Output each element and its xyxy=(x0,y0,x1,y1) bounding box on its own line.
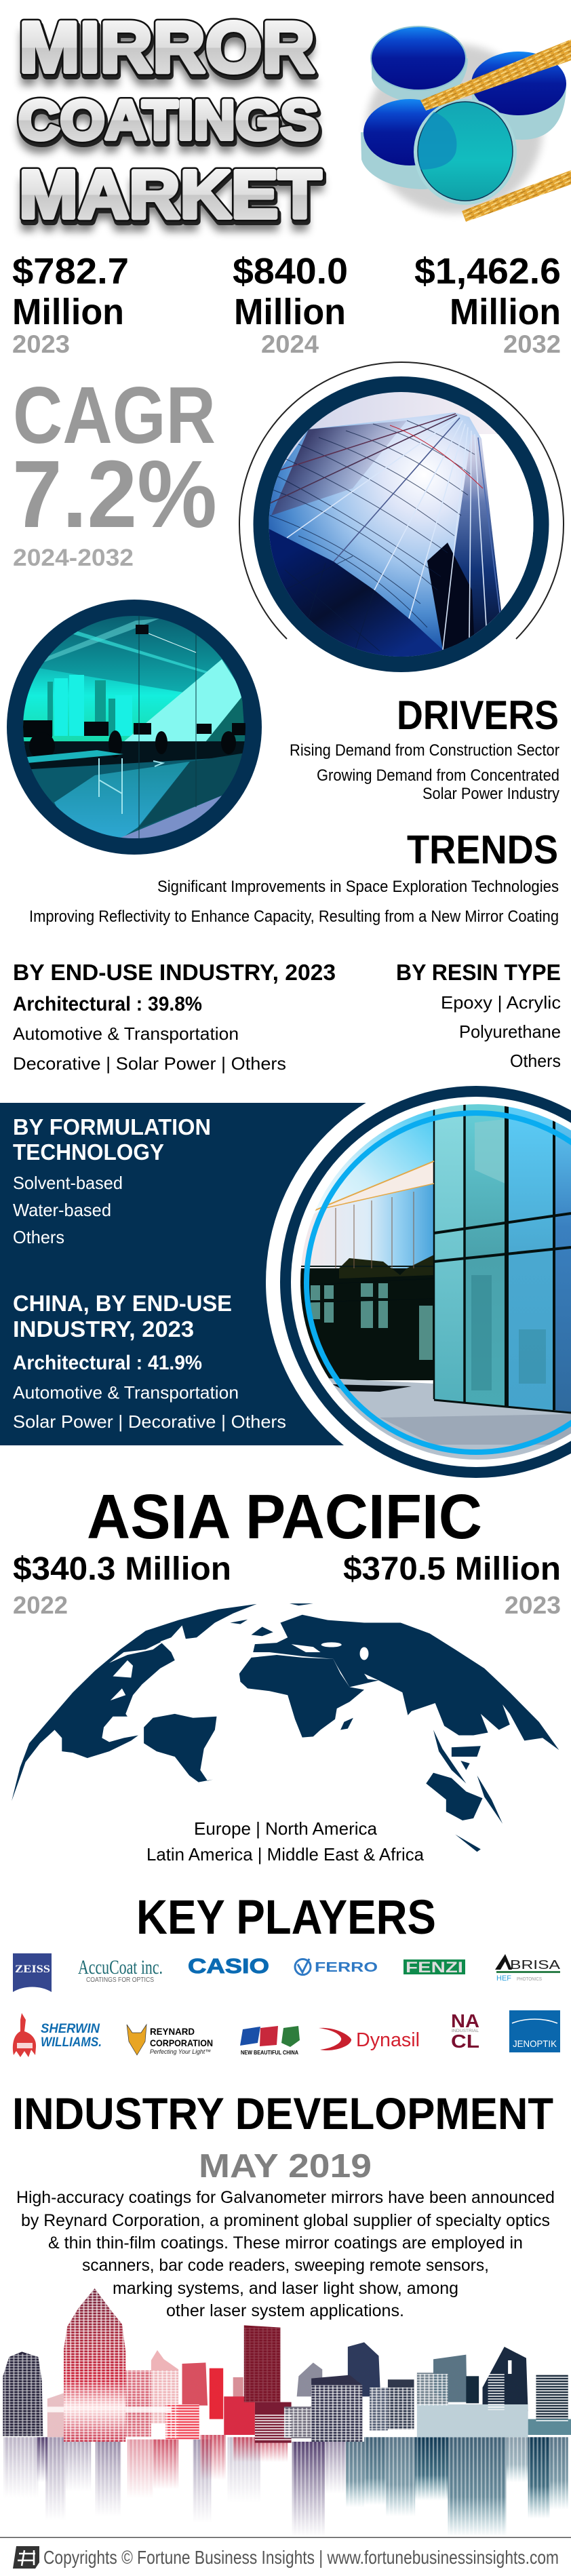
segment: by formulation technology: Others xyxy=(13,1227,64,1247)
segment: china by end-use industry: Automotive & Transportation xyxy=(13,1382,239,1403)
logo: New Beautiful China: NEW BEAUTIFUL CHINA xyxy=(241,2049,298,2056)
segment: china by end-use industry xyxy=(13,1291,286,1432)
photo circle: glass building xyxy=(266,1072,571,1492)
logo: Ferro: FERRO xyxy=(315,1960,378,1975)
title shadow: MARKET xyxy=(19,168,321,243)
segment: by resin type: Others xyxy=(510,1051,561,1071)
title face: MARKET xyxy=(19,157,321,233)
title shadow: COATINGS xyxy=(18,100,319,162)
logo: Fenzi xyxy=(403,1959,465,1976)
stat: 2032: $1,462.6 xyxy=(414,251,561,292)
other regions: Latin America | Middle East & Africa xyxy=(146,1844,425,1865)
stat: asia pacific 2022: 2022 xyxy=(13,1591,68,1619)
segment: by end-use industry xyxy=(13,960,336,1074)
paragraph: industry development: by Reynard Corporation, a prominent global supplier of specialty optics xyxy=(21,2211,550,2230)
paragraph: industry development: & thin thin-film coatings. These mirror coatings are employed in xyxy=(48,2233,523,2252)
trend items xyxy=(29,878,559,926)
other regions: Europe | North America xyxy=(194,1818,378,1839)
logo: NACL xyxy=(451,2010,479,2052)
title extrusion: COATINGS xyxy=(20,93,320,155)
segment: by formulation technology: BY FORMULATION xyxy=(13,1114,211,1139)
heading: trends: TRENDS xyxy=(407,827,558,872)
segment: by formulation technology: Solvent-based xyxy=(13,1173,123,1193)
title extrusion xyxy=(20,11,323,236)
segment: by end-use industry: Architectural : 39.8% xyxy=(13,993,202,1015)
paragraph: industry development: High-accuracy coatings for Galvanometer mirrors have been announced xyxy=(16,2188,555,2207)
heading: asia pacific: ASIA PACIFIC xyxy=(87,1481,482,1552)
stat: 2032 xyxy=(414,251,561,358)
skyline image xyxy=(0,2288,571,2537)
CAGR block: CAGR xyxy=(13,370,216,461)
driver items: Solar Power Industry xyxy=(422,785,559,803)
logo: Reynard Corporation: REYNARD xyxy=(150,2026,195,2037)
segment: by formulation technology: TECHNOLOGY xyxy=(13,1139,164,1165)
stat: 2023 xyxy=(12,251,129,358)
panel: navy band xyxy=(0,1103,420,1445)
logo: AccuCoat xyxy=(78,1956,163,1984)
stat: 2023: 2023 xyxy=(12,330,70,358)
title outline: MIRROR xyxy=(19,7,315,87)
logo: Reynard Corporation: CORPORATION xyxy=(150,2037,213,2048)
logo: NACL: CL xyxy=(451,2031,479,2052)
stat: 2024 xyxy=(233,251,348,358)
logo: New Beautiful China xyxy=(240,2026,300,2056)
title shadow: MIRROR xyxy=(19,18,315,98)
segment: china by end-use industry: Solar Power | Decorative | Others xyxy=(13,1411,286,1432)
title face: COATINGS xyxy=(18,90,319,151)
logo: Fenzi: FENZI xyxy=(406,1959,463,1976)
logo: Abrisa: BRISA xyxy=(510,1958,560,1972)
logo: Ferro xyxy=(295,1959,378,1975)
stat: 2023: $782.7 xyxy=(12,251,129,292)
segment: by end-use industry: BY END-USE INDUSTRY, 2023 xyxy=(13,960,336,985)
segment: by formulation technology xyxy=(13,1114,211,1247)
logo: Reynard Corporation xyxy=(127,2025,213,2055)
stat: 2024: Million xyxy=(234,292,346,332)
segment: by resin type: BY RESIN TYPE xyxy=(396,960,561,985)
heading: key players: KEY PLAYERS xyxy=(136,1891,436,1945)
title xyxy=(18,7,323,243)
paragraph: industry development: scanners, bar code readers, sweeping remote sensors, xyxy=(82,2256,489,2275)
segment: by resin type xyxy=(396,960,561,1071)
logo: AccuCoat: AccuCoat inc. xyxy=(78,1956,163,1978)
photo circle: glass tower xyxy=(239,362,564,672)
CAGR block xyxy=(12,370,217,571)
logo: Sherwin-Williams: SHERWIN xyxy=(41,2022,100,2036)
trends xyxy=(29,827,559,926)
segment: by end-use industry: Decorative | Solar Power | Others xyxy=(13,1053,286,1074)
CAGR block: 2024-2032 xyxy=(13,545,134,571)
stat: 2024: $840.0 xyxy=(233,251,348,292)
logo: Sherwin-Williams: WILLIAMS. xyxy=(41,2035,102,2050)
paragraph: industry development xyxy=(16,2188,555,2320)
other regions xyxy=(146,1818,425,1865)
title outline: COATINGS xyxy=(18,90,319,151)
title outline: MARKET xyxy=(19,157,321,233)
icon: coated mirror lenses xyxy=(361,26,571,222)
paragraph: industry development: other laser system applications. xyxy=(166,2301,404,2320)
logo: NACL: NA xyxy=(451,2010,479,2031)
driver items xyxy=(290,741,559,803)
logo: Jenoptik: JENOPTIK xyxy=(513,2038,557,2049)
segment: by end-use industry: Automotive & Transportation xyxy=(13,1023,239,1044)
segment: china by end-use industry: INDUSTRY, 2023 xyxy=(13,1316,194,1342)
segment: by formulation technology: Water-based xyxy=(13,1200,111,1220)
logo: Abrisa xyxy=(495,1954,560,1983)
skyline reflections xyxy=(0,2435,571,2537)
logo: Zeiss xyxy=(13,1953,52,1992)
segment: by resin type: Polyurethane xyxy=(459,1021,561,1042)
stat: asia pacific 2022 xyxy=(13,1551,231,1619)
logo: Sherwin-Williams xyxy=(13,2013,102,2057)
title outline xyxy=(18,7,321,233)
logo: Jenoptik xyxy=(509,2010,560,2052)
stat: asia pacific 2023: 2023 xyxy=(505,1591,561,1619)
icon: Fortune Business Insights logo xyxy=(13,2546,39,2569)
stat: 2023: Million xyxy=(12,292,124,332)
CAGR block: 7.2% xyxy=(12,440,217,547)
segment: china by end-use industry: Architectural : 41.9% xyxy=(13,1352,202,1374)
logo: Reynard Corporation: Perfecting Your Light™ xyxy=(150,2048,211,2055)
logo: Dynasil xyxy=(319,2028,420,2051)
logo: Abrisa: HEF xyxy=(496,1974,511,1983)
stat: asia pacific 2023 xyxy=(343,1551,561,1619)
logo: Dynasil: Dynasil xyxy=(356,2029,420,2051)
stat: 2024: 2024 xyxy=(261,330,319,358)
segment: china by end-use industry: CHINA, BY END-USE xyxy=(13,1291,232,1316)
logo: NACL: INDUSTRIAL xyxy=(452,2029,479,2033)
segment: by resin type: Epoxy | Acrylic xyxy=(441,992,561,1013)
skyline buildings: red side xyxy=(3,2325,311,2443)
footer xyxy=(13,2546,559,2569)
date: may 2019: MAY 2019 xyxy=(199,2148,372,2185)
stat: 2032: 2032 xyxy=(503,330,561,358)
logo: Zeiss: ZEISS xyxy=(15,1964,50,1975)
title face: MIRROR xyxy=(19,7,315,87)
paragraph: industry development: marking systems, and laser light show, among xyxy=(113,2279,458,2298)
logo: AccuCoat: COATINGS FOR OPTICS xyxy=(86,1976,154,1984)
title extrusion: MIRROR xyxy=(20,11,316,91)
stat: 2032: Million xyxy=(450,292,561,332)
stat: asia pacific 2022: $340.3 Million xyxy=(13,1551,231,1587)
logo: Casio: CASIO xyxy=(188,1954,269,1978)
logo: Abrisa: PHOTONICS xyxy=(517,1977,542,1982)
photo circle: office interior xyxy=(7,600,262,855)
skyline buildings: blue side xyxy=(297,2342,571,2442)
title extrusion: MARKET xyxy=(20,160,323,236)
world map globe xyxy=(12,1603,559,1852)
title face xyxy=(18,7,321,233)
stat: asia pacific 2023: $370.5 Million xyxy=(343,1551,561,1587)
title shadow xyxy=(18,18,321,243)
drivers xyxy=(290,692,559,803)
